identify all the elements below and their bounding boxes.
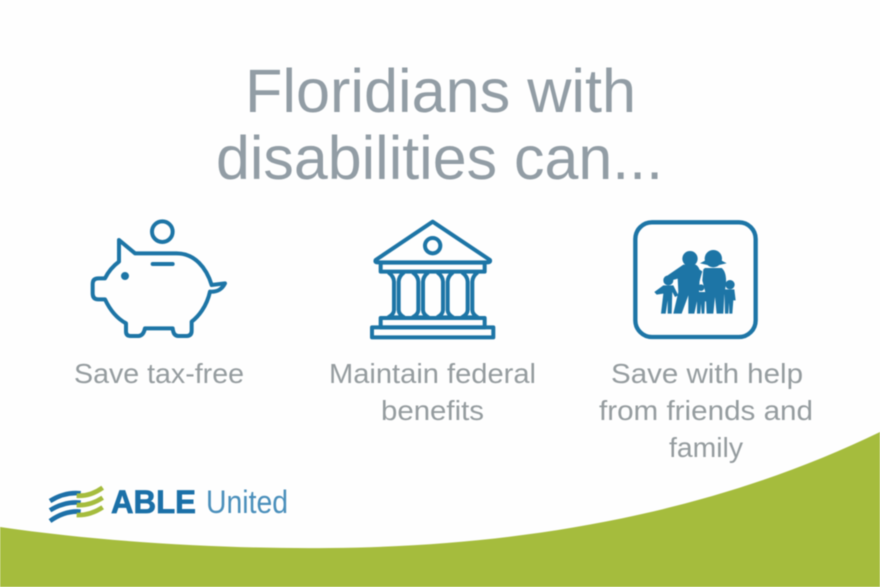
logo: ABLE United: [50, 484, 288, 521]
green swoosh: [0, 432, 880, 587]
label: save with help from friends and family: Save with help: [611, 358, 803, 389]
label: maintain federal benefits: benefits: [381, 395, 484, 426]
title: Floridians with: [245, 57, 636, 125]
label: save with help from friends and family: family: [669, 432, 743, 463]
label: maintain federal benefits: [329, 358, 536, 426]
logo: ABLE United: ABLE: [111, 484, 196, 520]
title: disabilities can...: [216, 124, 663, 192]
label: save with help from friends and family: [599, 358, 813, 463]
icon: piggy bank: [93, 221, 225, 336]
label: maintain federal benefits: Maintain federal: [329, 358, 536, 389]
icon: logo ribbons: [50, 488, 103, 521]
label: save with help from friends and family: from friends and: [599, 395, 813, 426]
icon: family in rounded square: [635, 222, 756, 337]
title: [216, 57, 663, 192]
logo: ABLE United: United: [206, 484, 288, 520]
icon: bank building: [372, 222, 493, 337]
label: save tax-free: Save tax-free: [74, 358, 244, 389]
